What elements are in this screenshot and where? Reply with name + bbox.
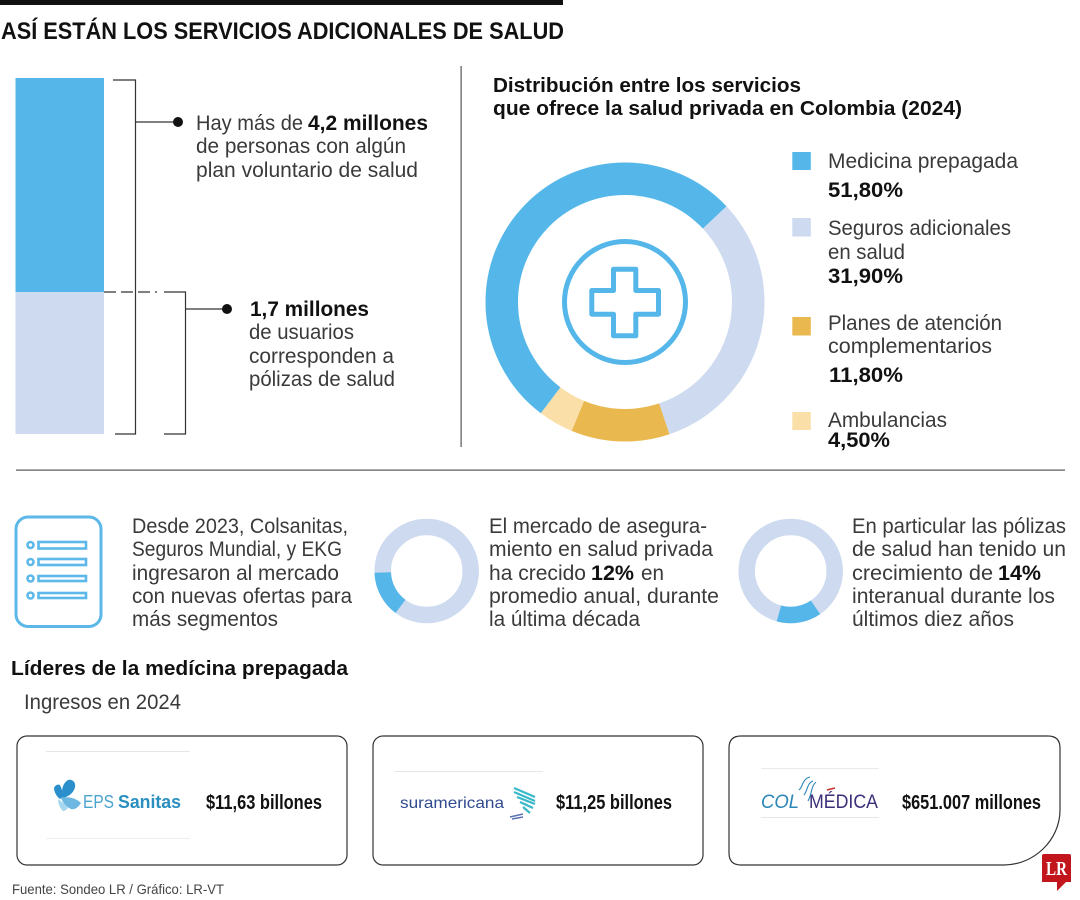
logo: Colmédica bbox=[761, 777, 878, 813]
stacked bar bbox=[16, 78, 104, 434]
text: market growth: en bbox=[641, 562, 664, 585]
text: policies growth: últimos diez años bbox=[852, 608, 1014, 631]
text: 1,7 millones: de usuarios bbox=[249, 321, 354, 344]
text: 1,7 millones: 1,7 millones bbox=[250, 298, 369, 321]
logo: EPS Sanitas bbox=[54, 780, 181, 812]
logo: Colmédica: COL bbox=[761, 792, 799, 813]
text: policies growth: En particular las pólizas bbox=[852, 515, 1066, 538]
text: market growth: El mercado de asegura- bbox=[489, 515, 707, 538]
text: new entrants: con nuevas ofertas para bbox=[132, 585, 352, 608]
logo: LR: LR bbox=[1046, 858, 1067, 880]
icon: medical cross bbox=[564, 242, 686, 362]
text: new entrants: Desde 2023, Colsanitas, bbox=[132, 515, 348, 538]
text: policies growth: de salud han tenido un bbox=[852, 538, 1066, 561]
source: Fuente: Sondeo LR / Gráfico: LR-VT bbox=[12, 881, 224, 897]
logo: EPS Sanitas: EPS bbox=[83, 792, 114, 812]
icon: checklist bbox=[16, 517, 101, 626]
legend: planes de atención bbox=[792, 312, 1002, 387]
legend: medicina prepagada bbox=[792, 150, 1018, 202]
logo: Colmédica: MÉDICA bbox=[809, 792, 878, 813]
legend: seguros adicionales: 31,90% bbox=[828, 265, 903, 288]
bracket: voluntary plans bbox=[113, 80, 183, 434]
card: EPS Sanitas: $11,63 billones bbox=[206, 792, 322, 814]
donut: 14% growth bbox=[747, 527, 835, 615]
text: policies growth bbox=[852, 515, 1066, 631]
text: market growth: la última década bbox=[489, 608, 640, 631]
text: market growth: promedio anual, durante bbox=[489, 585, 719, 608]
logo: EPS Sanitas: Sanitas bbox=[118, 792, 181, 812]
text: 4,2 millones: 4,2 millones bbox=[308, 112, 428, 135]
text: 4,2 millones: Hay más de bbox=[196, 112, 303, 135]
text: 4,2 millones: de personas con algún bbox=[196, 135, 406, 158]
text: policies growth: interanual durante los bbox=[852, 585, 1055, 608]
legend: medicina prepagada: 51,80% bbox=[828, 179, 903, 202]
text: market growth: miento en salud privada bbox=[489, 538, 713, 561]
distribution heading: que ofrece la salud privada en Colombia (2024) bbox=[493, 98, 962, 120]
subheading: Ingresos en 2024 bbox=[24, 691, 181, 714]
leaders heading: Líderes de la medícina prepagada bbox=[11, 658, 349, 680]
text: 4,2 millones bbox=[196, 112, 428, 182]
legend: seguros adicionales bbox=[792, 217, 1011, 288]
legend: ambulancias bbox=[792, 409, 947, 452]
title: ASÍ ESTÁN LOS SERVICIOS ADICIONALES DE SALUD bbox=[1, 17, 564, 45]
legend: seguros adicionales: en salud bbox=[828, 241, 905, 264]
bracket: health policies bbox=[104, 292, 232, 434]
logo: Suramericana: suramericana bbox=[400, 795, 504, 812]
legend: ambulancias: 4,50% bbox=[828, 429, 890, 452]
text: market growth: ha crecido bbox=[489, 562, 586, 585]
text: market growth: 12% bbox=[591, 562, 634, 585]
legend: medicina prepagada: Medicina prepagada bbox=[828, 150, 1018, 173]
logo: LR bbox=[1042, 854, 1071, 891]
text: policies growth: 14% bbox=[998, 562, 1041, 585]
distribution heading: Distribución entre los servicios bbox=[493, 75, 801, 97]
text: policies growth: crecimiento de bbox=[852, 562, 993, 585]
title bbox=[0, 0, 564, 45]
text: 1,7 millones: pólizas de salud bbox=[249, 368, 395, 391]
card: Suramericana bbox=[373, 736, 703, 865]
distribution heading bbox=[493, 75, 962, 120]
text: new entrants: ingresaron al mercado bbox=[132, 562, 339, 585]
card: Colmédica bbox=[729, 736, 1060, 865]
legend: seguros adicionales: Seguros adicionales bbox=[828, 217, 1011, 240]
legend: ambulancias: Ambulancias bbox=[828, 409, 947, 432]
text: 1,7 millones bbox=[249, 298, 395, 391]
card: Suramericana: $11,25 billones bbox=[556, 792, 672, 814]
donut chart: services distribution bbox=[502, 179, 748, 425]
text: new entrants: más segmentos bbox=[132, 608, 278, 631]
donut: 12% growth bbox=[383, 527, 471, 615]
card: EPS Sanitas bbox=[17, 736, 347, 865]
text: new entrants: Seguros Mundial, y EKG bbox=[132, 538, 342, 561]
legend: planes de atención: complementarios bbox=[828, 335, 992, 358]
text: market growth bbox=[489, 515, 719, 631]
text: 1,7 millones: corresponden a bbox=[249, 345, 394, 368]
logo: Suramericana bbox=[400, 788, 535, 819]
legend: planes de atención: 11,80% bbox=[829, 364, 903, 387]
card: Colmédica: $651.007 millones bbox=[902, 792, 1041, 814]
text: new entrants bbox=[132, 515, 352, 631]
legend: planes de atención: Planes de atención bbox=[828, 312, 1002, 335]
text: 4,2 millones: plan voluntario de salud bbox=[196, 159, 418, 182]
